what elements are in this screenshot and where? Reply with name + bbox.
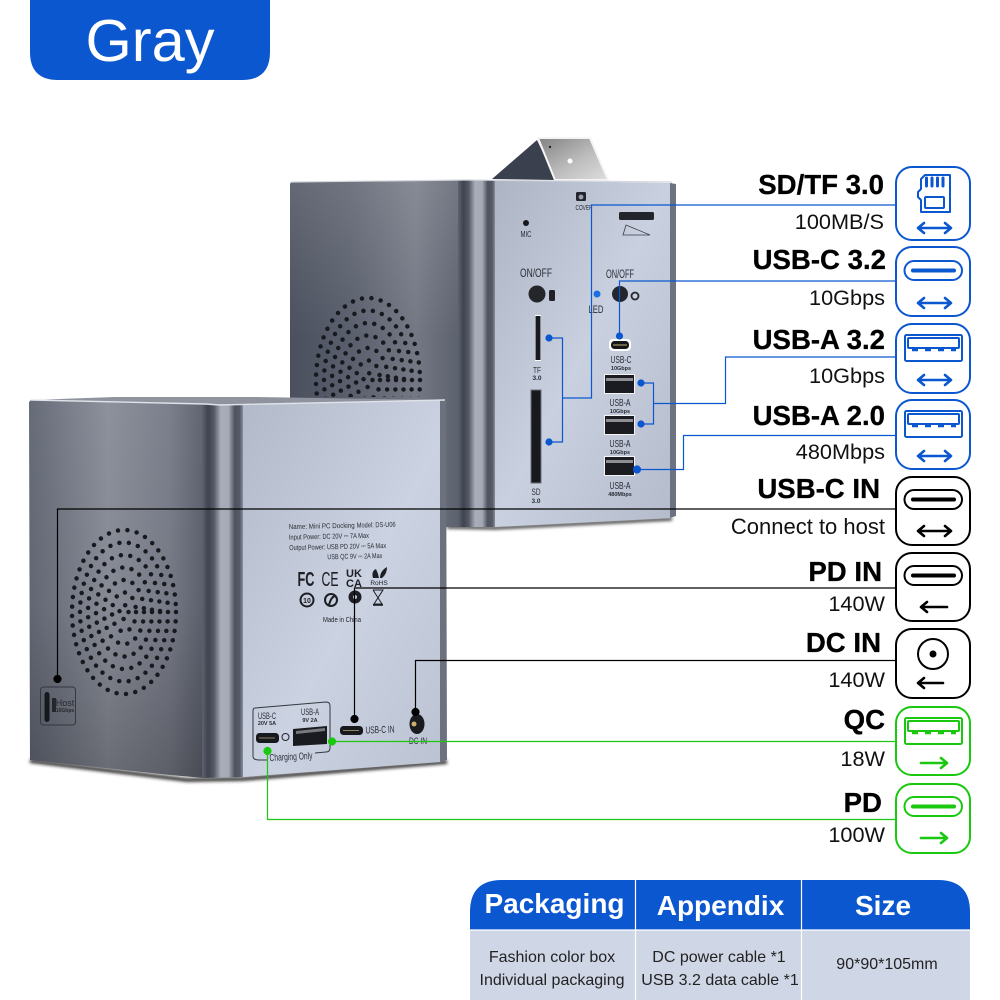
rear face controls and labels: USB-A (610, 481, 631, 492)
label: USB-A 3.2 (753, 324, 885, 388)
table header: Size (855, 890, 911, 921)
rear face controls and labels: USB-C (610, 355, 632, 366)
rear face controls and labels: USB-A (610, 439, 631, 450)
rear face controls and labels: 10Gbps (610, 450, 630, 456)
label: USB-A 2.0: 480Mbps (796, 439, 885, 464)
label: DC IN: DC IN (806, 627, 881, 658)
callout line: SD/TF (546, 205, 895, 445)
certification marks: CA (346, 578, 362, 590)
title tab: Gray (30, 0, 270, 80)
label: DC IN: 140W (828, 667, 886, 692)
label: SD/TF 3.0: 100MB/S (795, 209, 884, 234)
usb-c in port (340, 724, 395, 737)
table body: Individual packaging (480, 972, 624, 989)
callout line: USB-C IN (54, 509, 895, 682)
icon: USB-C IN bidirectional (896, 477, 970, 545)
spec label text (289, 520, 396, 562)
label: DC IN (806, 627, 886, 692)
label: USB-C 3.2: USB-C 3.2 (753, 244, 886, 275)
label: PD: 100W (828, 822, 886, 847)
front speaker grille (72, 530, 176, 694)
table header: Appendix (657, 890, 785, 921)
icon: USB-A 3.2 bidirectional (896, 324, 970, 393)
label: USB-C IN: Connect to host (731, 514, 885, 539)
label: USB-A 3.2: 10Gbps (809, 363, 885, 388)
table body: USB 3.2 data cable *1 (641, 972, 799, 989)
spec label text: Name: Mini PC Docking (289, 521, 355, 531)
host port (40, 687, 76, 725)
rear face controls and labels: 3.0 (532, 375, 542, 382)
label: USB-A 2.0: USB-A 2.0 (753, 400, 885, 431)
rear face controls and labels: ON/OFF (606, 269, 634, 281)
dc in jack (409, 714, 427, 747)
label: PD IN: PD IN (808, 556, 882, 587)
rear face controls and labels: 10Gbps (611, 366, 631, 372)
label: PD IN: 140W (828, 591, 886, 616)
charging only ports: Charging Only (269, 751, 313, 764)
label: PD (828, 787, 886, 847)
camera on top of dock (492, 138, 608, 180)
rear face controls and labels: USB-A (610, 398, 631, 409)
label: USB-C 3.2 (753, 244, 886, 310)
certification marks: UK (346, 568, 362, 580)
table body: Fashion color box (489, 949, 615, 966)
icon: DC IN input arrow (896, 629, 970, 698)
product: rear dock with front ports (290, 138, 676, 528)
certification marks: RoHS (370, 580, 388, 587)
label: SD/TF 3.0: SD/TF 3.0 (758, 169, 884, 200)
rear speaker grille (314, 296, 422, 397)
spec label text: Output Power: USB PD 20V ⎓ 5A Max (289, 541, 387, 552)
label: PD: PD (844, 787, 882, 818)
title tab: Gray: Gray (86, 7, 215, 74)
host port: Host (56, 698, 75, 708)
usb-c in port: USB-C IN (365, 724, 395, 737)
certification marks: FC (298, 569, 314, 591)
rear face controls and labels: COVER (576, 205, 592, 212)
callout line: DC IN (412, 660, 895, 716)
callout line: PD (264, 748, 895, 820)
product: front dock with input and charging ports (29, 397, 447, 780)
charging only ports: 20V 5A (258, 721, 276, 727)
callout line: USB-C 3.2 (616, 281, 895, 339)
label: PD IN (808, 556, 886, 616)
certification marks (298, 567, 388, 624)
charging only ports: USB-A (301, 707, 319, 717)
charging only ports: USB-C (258, 711, 276, 721)
label: USB-C IN: USB-C IN (757, 473, 880, 504)
label: SD/TF 3.0 (758, 169, 884, 234)
label: USB-A 3.2: USB-A 3.2 (753, 324, 885, 355)
table body (470, 930, 970, 1000)
certification marks: 10 (303, 598, 311, 605)
rear face controls and labels: TF (533, 366, 541, 375)
rear face controls and labels (520, 192, 654, 505)
table body: 90*90*105mm (836, 956, 938, 973)
certification marks: Made in China (323, 615, 362, 624)
icon: USB-A 2.0 bidirectional (896, 400, 970, 469)
dc in jack: DC IN (409, 736, 427, 747)
icon: PD output arrow (896, 784, 970, 853)
callout line: USB-A 2.0 (634, 436, 895, 473)
label: QC: QC (844, 704, 885, 735)
callout line: QC (328, 738, 895, 745)
table header: Packaging (484, 888, 625, 919)
spec label text: Model: DS-U06 (357, 520, 396, 530)
rear face controls and labels: MIC (520, 230, 532, 239)
label: USB-A 2.0 (753, 400, 885, 464)
rear face controls and labels: 10Gbps (610, 409, 630, 415)
spec table (470, 880, 970, 1000)
label: USB-C IN (731, 473, 885, 539)
label: USB-C 3.2: 10Gbps (809, 285, 885, 310)
certification marks: CE (322, 569, 338, 591)
callout line: USB-A 3.2 (638, 357, 895, 427)
label: QC (840, 704, 886, 771)
icon: PD IN input arrow (896, 553, 970, 621)
rear face controls and labels: 3.0 (531, 498, 541, 505)
rear face controls and labels: 480Mbps (608, 492, 632, 498)
host port: 10Gbps (56, 708, 74, 714)
rear face controls and labels: SD (532, 487, 541, 497)
spec label text: Input Power: DC 20V ⎓ 7A Max (289, 531, 369, 542)
callout line: PD IN (351, 588, 895, 722)
icon: QC output arrow (896, 707, 970, 775)
icon: USB-C 3.2 bidirectional (896, 247, 970, 316)
icon: SD card bidirectional (896, 167, 970, 240)
label: QC: 18W (840, 746, 886, 771)
rear face controls and labels: ON/OFF (520, 266, 552, 280)
rear face controls and labels: LED (588, 304, 604, 316)
table body: DC power cable *1 (652, 949, 786, 966)
charging only ports: 9V 2A (302, 718, 318, 724)
table header (470, 880, 970, 930)
charging only ports (253, 702, 330, 764)
spec label text: USB QC 9V ⎓ 2A Max (327, 551, 383, 561)
